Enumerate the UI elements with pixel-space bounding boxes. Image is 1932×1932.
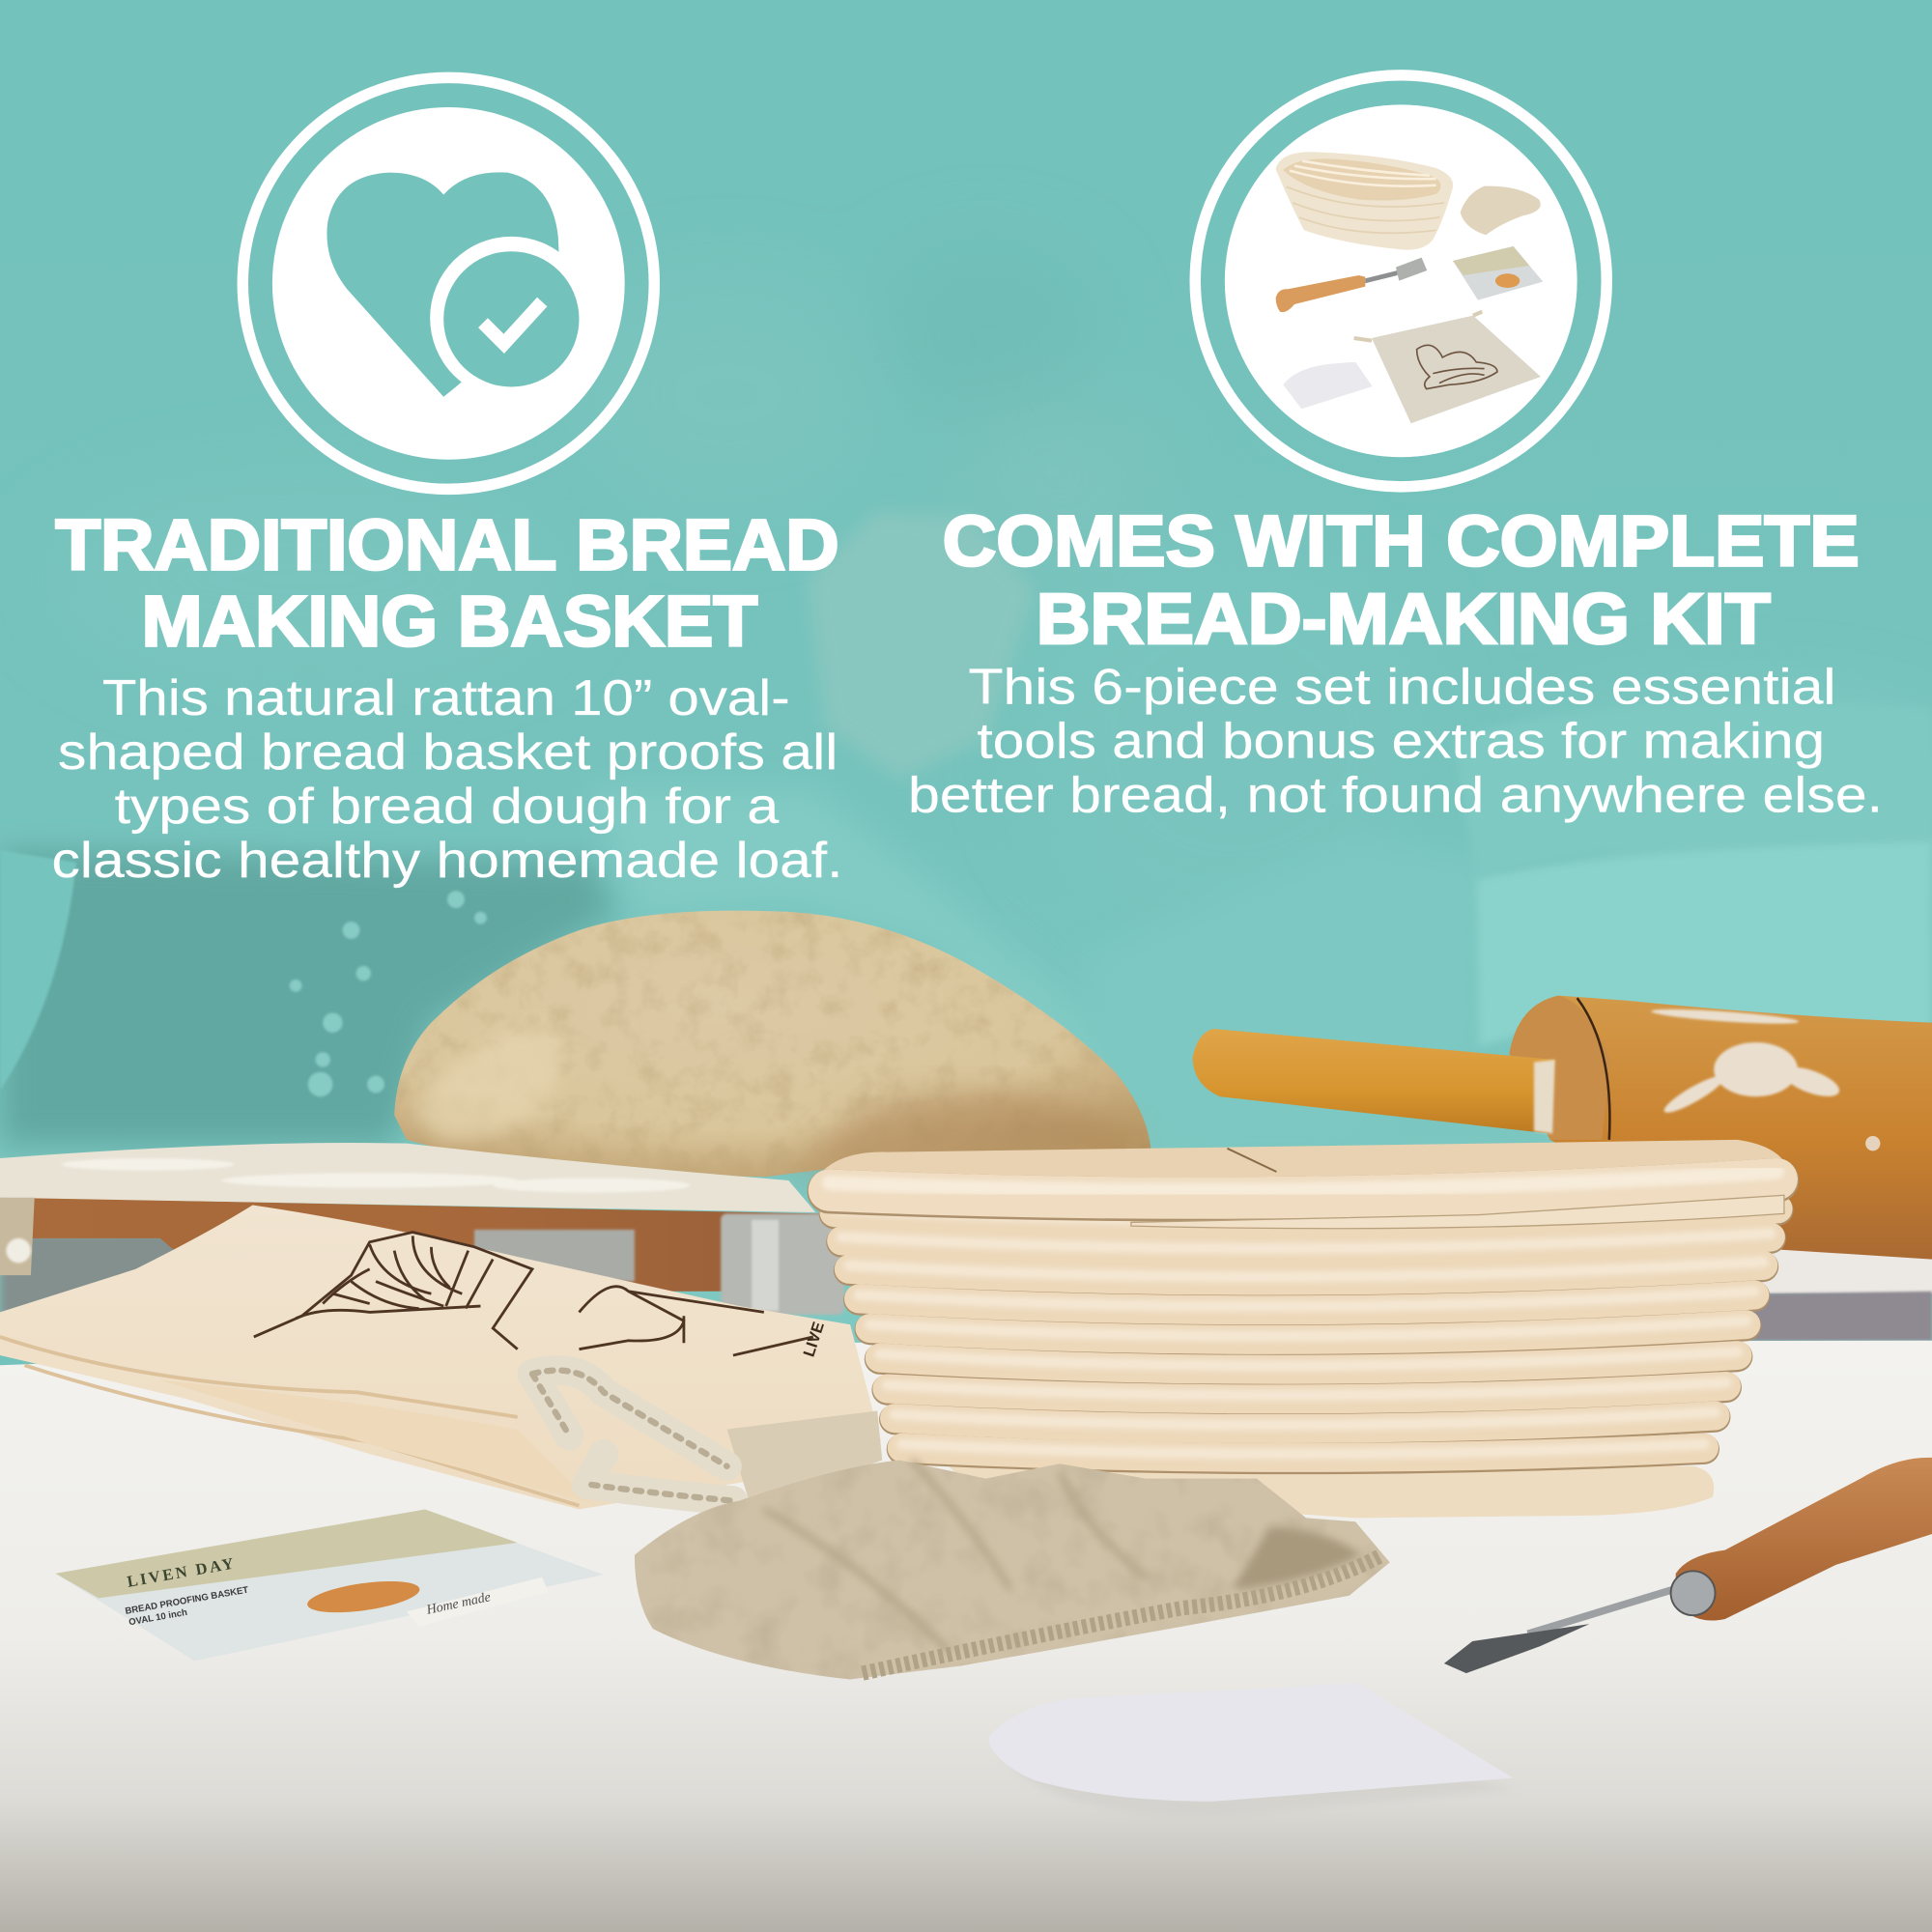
heading: traditional bread making basket (55, 504, 839, 661)
drawstring rope (532, 1371, 882, 1509)
kit bread bag (1354, 312, 1541, 423)
icon: heart badge (242, 77, 654, 489)
text block: basket description (52, 670, 842, 889)
heading: comes with complete bread-making kit: COMES WITH COMPLETE (943, 500, 1860, 581)
rolling pin (1193, 996, 1932, 1341)
bread lame tool (1444, 1458, 1932, 1673)
bag brand text: LIVE (800, 1320, 828, 1359)
kit cover cloth (1461, 186, 1541, 235)
heading: traditional bread making basket: TRADITIONAL BREAD (55, 504, 839, 584)
text block: basket description: types of bread dough for a (115, 779, 780, 835)
recipe card: Home made (424, 1589, 492, 1618)
recipe card: OVAL 10 inch (128, 1607, 188, 1628)
recipe card (55, 1509, 604, 1661)
bread bag with illustration (0, 1205, 882, 1509)
background: teal baking scene (0, 0, 1932, 1355)
text block: basket description: shaped bread basket proofs all (58, 724, 838, 781)
dough scraper (988, 1683, 1516, 1817)
recipe card: LIVEN DAY (126, 1553, 238, 1591)
kit card (1453, 246, 1543, 300)
text block: kit description: tools and bonus extras for making (977, 713, 1825, 769)
icon: kit contents circle (1195, 75, 1606, 487)
dough loaf (394, 911, 1151, 1177)
heading: comes with complete bread-making kit: BREAD-MAKING KIT (1037, 579, 1771, 659)
text block: basket description: classic healthy homemade loaf. (52, 833, 842, 889)
kit scraper (1283, 362, 1373, 409)
proofing basket (823, 1140, 1789, 1518)
recipe card: BREAD PROOFING BASKET (125, 1585, 249, 1617)
table surface (0, 1341, 1932, 1932)
heading: comes with complete bread-making kit (943, 500, 1860, 659)
text block: basket description: This natural rattan 10” oval- (102, 670, 790, 726)
text block: kit description: better bread, not found anywhere else. (908, 768, 1883, 824)
text block: kit description (908, 659, 1883, 824)
wooden board with flour (0, 1143, 844, 1319)
heading: traditional bread making basket: MAKING BASKET (142, 581, 757, 661)
linen basket cover (635, 1460, 1390, 1680)
kit lame (1276, 258, 1427, 312)
text block: kit description: This 6-piece set includes essential (969, 659, 1836, 715)
kit basket (1276, 152, 1453, 250)
